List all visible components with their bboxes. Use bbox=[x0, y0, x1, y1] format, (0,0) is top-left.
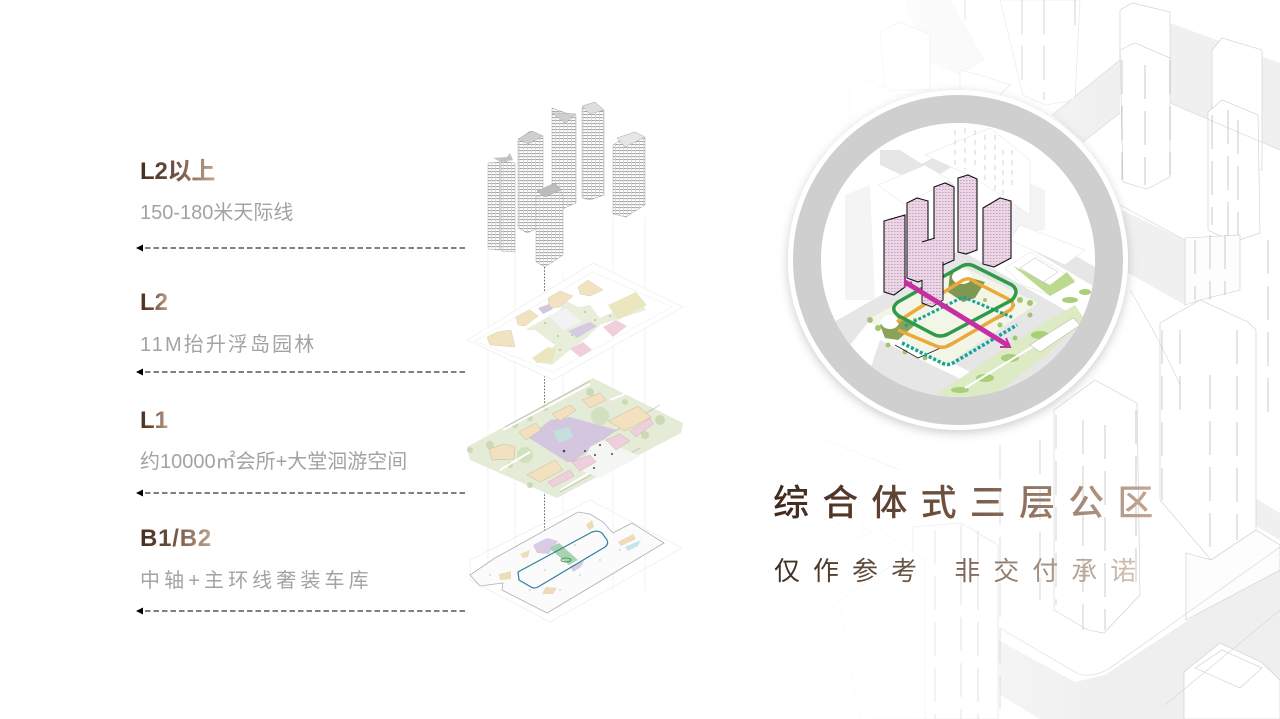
level B1/B2 plan bbox=[470, 500, 682, 622]
heading L2+: L2以上 bbox=[140, 158, 215, 185]
heading L2: L2 bbox=[140, 289, 168, 316]
level L1 plan bbox=[467, 378, 683, 498]
arrow L1 bbox=[136, 490, 468, 496]
heading B1/B2: B1/B2 bbox=[140, 525, 212, 552]
ring frame bbox=[788, 90, 1128, 430]
arrow L2+ bbox=[136, 244, 468, 252]
background: isometric city bbox=[720, 0, 1280, 719]
main title: 综合体式三层公区 bbox=[773, 482, 1167, 523]
arrow L2 bbox=[136, 368, 468, 376]
text L2+: 150-180米天际线 bbox=[140, 202, 293, 224]
arrow B1/B2 bbox=[136, 608, 468, 614]
circular inset bbox=[788, 90, 1128, 430]
vertical guide lines bbox=[488, 218, 645, 592]
text B1/B2: 中轴+主环线奢装车库 bbox=[140, 570, 373, 592]
subtitle: 仅作参考 非交付承诺 bbox=[774, 556, 1149, 586]
text L2: 11M抬升浮岛园林 bbox=[140, 334, 316, 356]
inset map bbox=[820, 120, 1100, 400]
text L1: 约10000㎡会所+大堂洄游空间 bbox=[140, 451, 407, 473]
level L2 plan bbox=[467, 263, 683, 380]
level towers L2+ bbox=[488, 102, 645, 267]
heading L1: L1 bbox=[140, 407, 168, 434]
